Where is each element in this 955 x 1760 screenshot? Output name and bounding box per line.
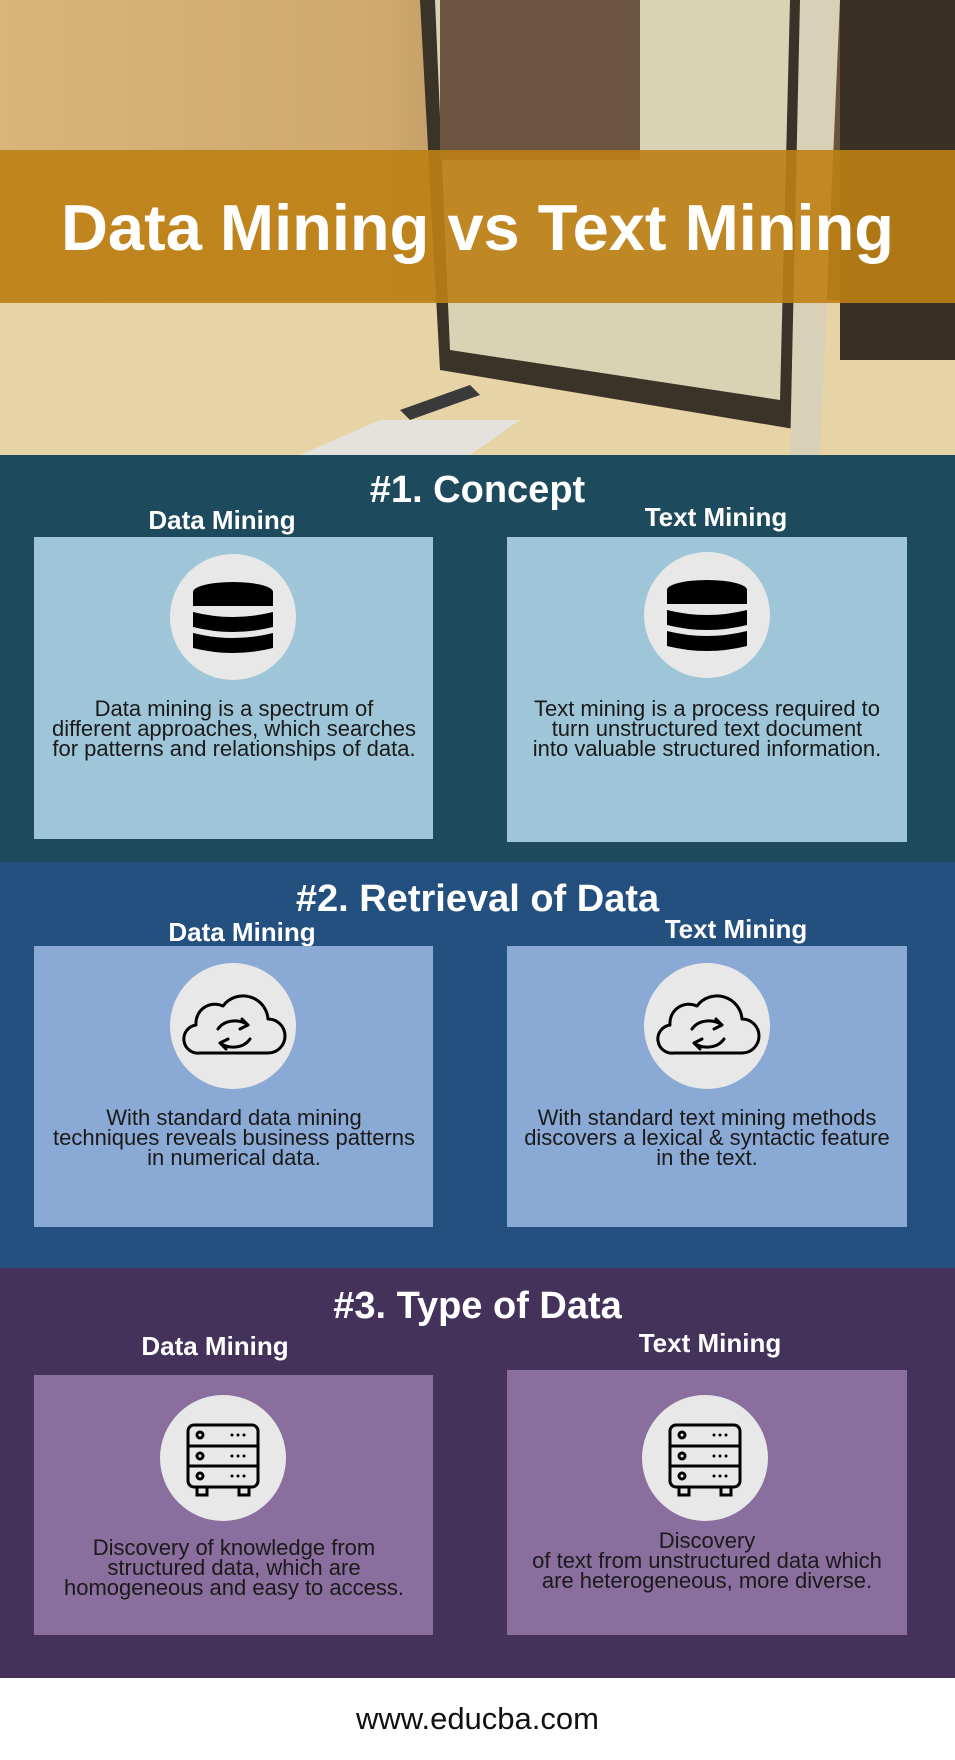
text: Data mining is a spectrum of: [95, 696, 373, 721]
text: discovers a lexical & syntactic feature: [524, 1125, 890, 1150]
icon: cloud sync: [170, 963, 296, 1089]
heading: concept: #1. Concept: [370, 469, 585, 511]
heading: retrieval: #2. Retrieval of Data: [296, 878, 659, 920]
text: homogeneous and easy to access.: [64, 1575, 404, 1600]
text: [52, 696, 416, 761]
subheading right: Text Mining: [639, 1328, 781, 1358]
section 1: concept: [0, 455, 955, 862]
text: [532, 1528, 882, 1593]
text: turn unstructured text document: [552, 716, 862, 741]
section 2: retrieval: [0, 862, 955, 1268]
text: [53, 1105, 415, 1170]
panel: data mining retrieval: [34, 946, 433, 1227]
text: techniques reveals business patterns: [53, 1125, 415, 1150]
text: structured data, which are: [107, 1555, 361, 1580]
subheading left: Data Mining: [168, 917, 316, 947]
subheading right: Text Mining: [665, 914, 807, 944]
section 3: type of data: [0, 1268, 955, 1678]
text: [533, 696, 881, 761]
text: Discovery of knowledge from: [93, 1535, 375, 1560]
panel: data mining concept: [34, 537, 433, 839]
icon: cloud sync: [644, 963, 770, 1089]
title: Data Mining vs Text Mining: [61, 191, 894, 264]
text: into valuable structured information.: [533, 736, 881, 761]
heading: type of data: #3. Type of Data: [333, 1285, 622, 1327]
panel: text mining retrieval: [507, 946, 907, 1227]
panel: data mining type: [34, 1375, 433, 1635]
subheading right: Text Mining: [645, 502, 787, 532]
text: Discovery: [659, 1528, 755, 1553]
icon: server: [160, 1395, 286, 1521]
text: different approaches, which searches: [52, 716, 416, 741]
panel: text mining type: [507, 1370, 907, 1635]
text: of text from unstructured data which: [532, 1548, 882, 1573]
text: for patterns and relationships of data.: [52, 736, 416, 761]
subheading left: Data Mining: [148, 505, 296, 535]
icon: database: [170, 554, 296, 680]
text: in the text.: [656, 1145, 758, 1170]
text: are heterogeneous, more diverse.: [542, 1568, 872, 1593]
panel: text mining concept: [507, 537, 907, 842]
text: in numerical data.: [147, 1145, 321, 1170]
text: With standard text mining methods: [538, 1105, 876, 1130]
header photo: [0, 0, 955, 455]
title band: [0, 150, 955, 303]
text: [64, 1535, 404, 1600]
text: [524, 1105, 890, 1170]
text: With standard data mining: [106, 1105, 362, 1130]
icon: server: [642, 1395, 768, 1521]
footer url: www.educba.com: [356, 1701, 599, 1736]
icon: database: [644, 552, 770, 678]
subheading left: Data Mining: [141, 1331, 289, 1361]
text: Text mining is a process required to: [534, 696, 880, 721]
